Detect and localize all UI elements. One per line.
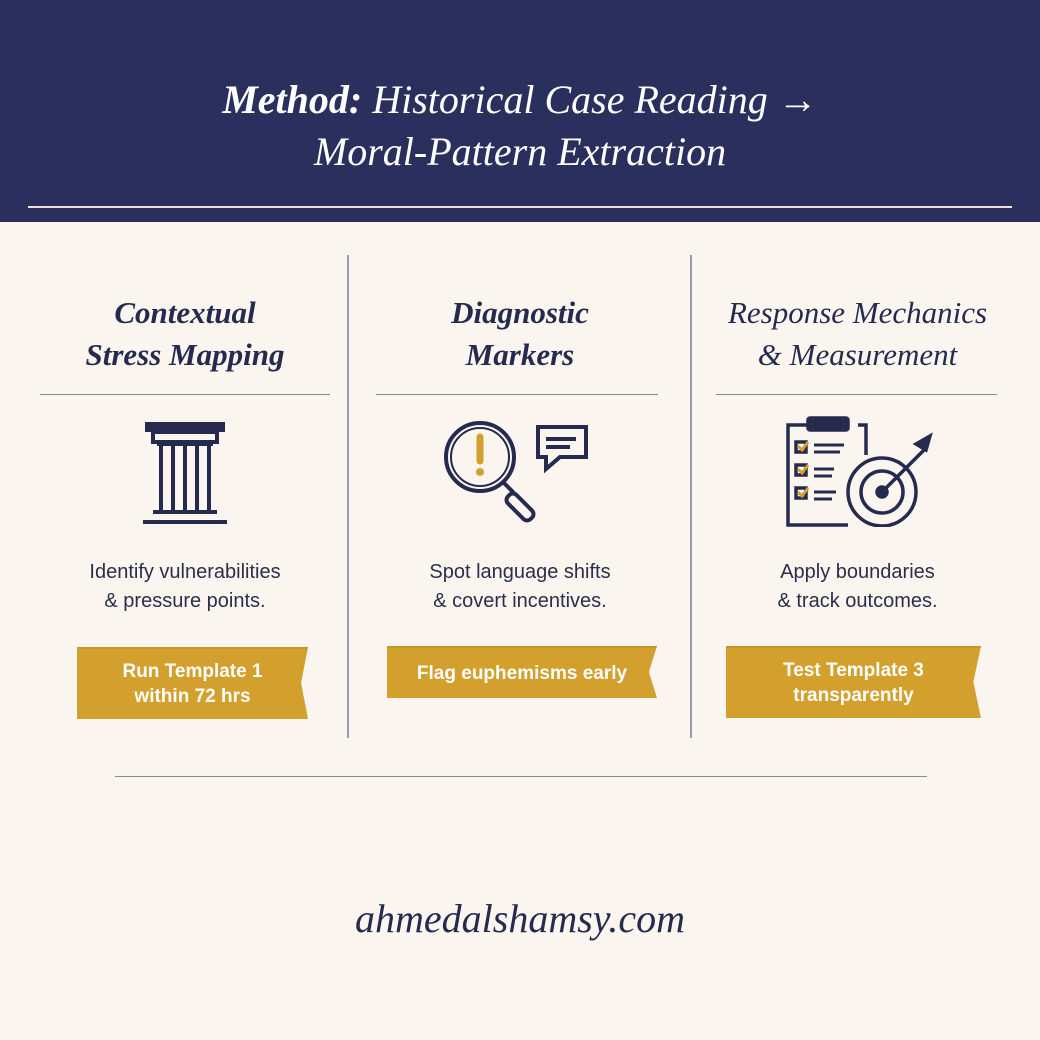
heading: Contextual — [114, 295, 256, 330]
banner: Run Template 1 — [122, 661, 263, 682]
body text: & pressure points. — [104, 590, 266, 612]
title — [222, 77, 818, 174]
body text: Identify vulnerabilities — [89, 561, 281, 583]
banner — [77, 647, 308, 719]
body text — [777, 561, 938, 612]
icon: clipboard and target — [786, 416, 933, 527]
heading: Markers — [466, 337, 574, 372]
banner: Flag euphemisms early — [417, 662, 627, 684]
heading — [728, 295, 987, 372]
heading — [450, 295, 589, 372]
body text: Apply boundaries — [780, 561, 935, 583]
banner: within 72 hrs — [134, 686, 251, 707]
banner — [726, 646, 981, 718]
signature: ahmedalshamsy.com — [355, 896, 685, 941]
heading: Stress Mapping — [86, 337, 284, 372]
heading: Diagnostic — [451, 295, 589, 330]
banner: Test Template 3 — [783, 660, 924, 681]
title: Moral-Pattern Extraction — [314, 129, 726, 174]
body text: & track outcomes. — [777, 590, 938, 612]
panel: diagnostic markers — [376, 295, 658, 698]
heading: Response Mechanics — [728, 295, 987, 330]
header band — [0, 0, 1040, 222]
heading: & Measurement — [758, 337, 957, 372]
body text: Spot language shifts — [429, 561, 611, 583]
icon: magnifier with speech bubble — [444, 421, 588, 522]
body text — [429, 561, 611, 612]
body text: & covert incentives. — [433, 590, 607, 612]
panel: contextual stress mapping — [40, 295, 330, 719]
panel: response mechanics — [716, 295, 997, 718]
banner — [387, 646, 657, 698]
icon: column — [143, 422, 227, 524]
title: Method: Historical Case Reading → — [222, 77, 818, 122]
heading — [86, 295, 284, 372]
banner: transparently — [793, 685, 914, 706]
body text — [89, 561, 281, 612]
